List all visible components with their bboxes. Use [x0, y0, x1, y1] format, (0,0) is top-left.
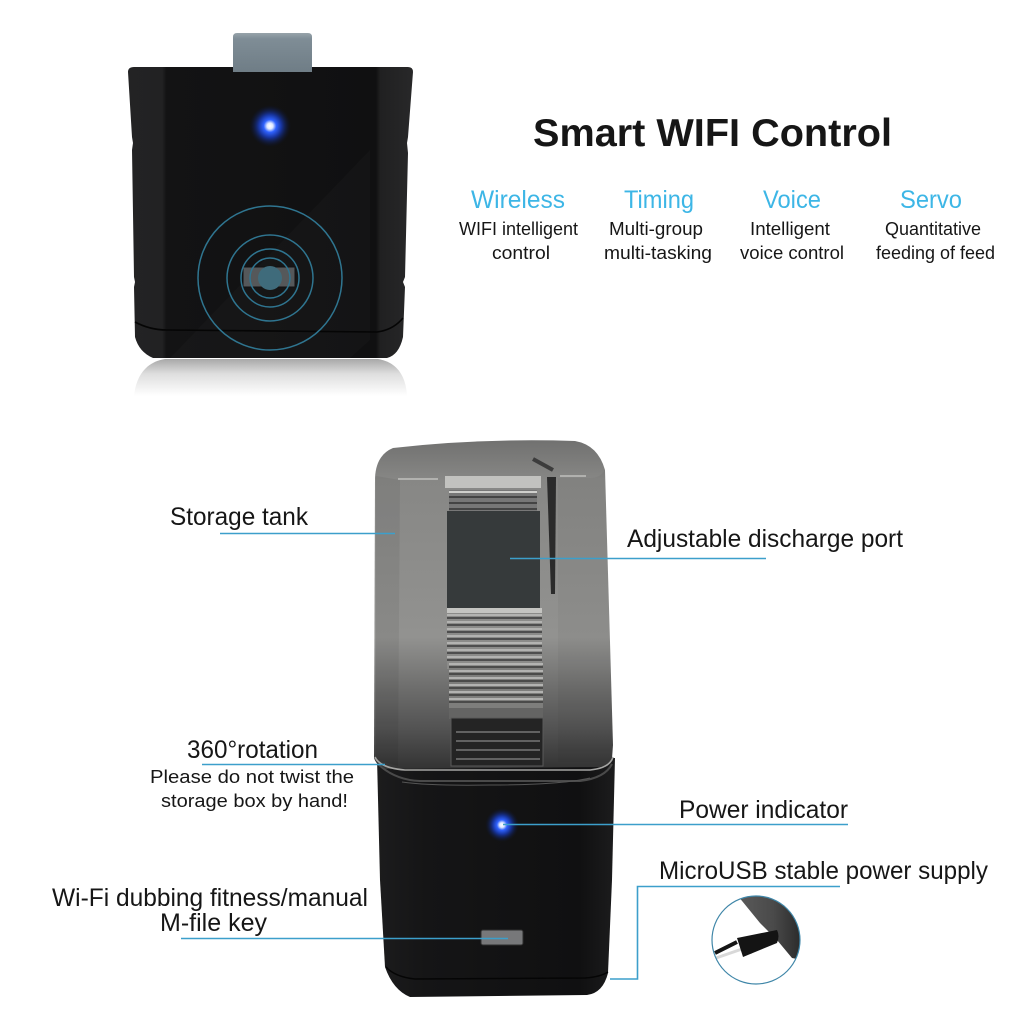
feature: Voice: Intelligent	[750, 219, 830, 239]
feature: Voice: Voice	[763, 186, 821, 214]
base bottom seam	[386, 967, 608, 979]
feature: Wireless: Wireless	[471, 186, 565, 214]
label: Power indicator: Power indicator	[679, 796, 848, 824]
grey feed tab	[233, 33, 312, 72]
blue indicator light	[249, 105, 291, 147]
label: Wi-Fi dubbing key: M-file key	[160, 909, 267, 937]
device: feeder front view	[374, 440, 615, 997]
inset: MicroUSB cable photo	[710, 895, 802, 985]
discharge window	[447, 511, 540, 608]
tank left facet shading	[376, 476, 400, 766]
silver ring between tank and base	[375, 757, 613, 770]
label: 360 rotation warning: Please do not twist the	[150, 767, 354, 787]
feature: Servo	[876, 186, 995, 263]
label: Wi-Fi dubbing key	[52, 884, 508, 938]
feature: Voice	[740, 186, 844, 263]
device: top view of WiFi controller	[128, 33, 413, 396]
feature: Servo: Servo	[900, 186, 962, 214]
ribbed slide	[447, 608, 543, 719]
feature: Timing	[604, 186, 712, 263]
right side slot	[547, 477, 556, 594]
feature: Servo: feeding of feed	[876, 243, 995, 263]
label: MicroUSB power supply	[610, 857, 988, 979]
label: 360 rotation warning: 360°rotation	[187, 736, 318, 764]
glossy diagonal highlight	[170, 150, 370, 358]
shoulder highlight	[398, 476, 586, 479]
feature: Wireless	[459, 186, 578, 263]
feature: Timing: Multi-group	[609, 219, 703, 239]
feature: Wireless: WIFI intelligent	[459, 219, 578, 239]
device body	[128, 67, 413, 358]
translucent storage tank	[374, 440, 613, 769]
feature: Servo: Quantitative	[885, 219, 981, 239]
key with concentric signal rings	[198, 206, 342, 350]
heading: Smart WIFI Control: Smart WIFI Control	[533, 112, 892, 155]
label: Adjustable discharge port: Adjustable discharge port	[627, 525, 903, 553]
sliding gate top	[445, 476, 541, 488]
feature: Timing: Timing	[624, 186, 694, 214]
label: Storage tank: Storage tank	[170, 503, 308, 531]
seam line	[135, 318, 403, 332]
M-file key button	[481, 930, 523, 945]
label: 360 rotation warning: storage box by hand!	[161, 791, 348, 811]
tank right facet shading	[558, 470, 613, 762]
label: 360 rotation warning	[150, 736, 385, 811]
feature: Wireless: control	[492, 243, 550, 263]
feature: Timing: multi-tasking	[604, 243, 712, 263]
dark lower ribs	[451, 718, 543, 766]
black base	[377, 758, 615, 997]
power indicator light	[485, 808, 519, 842]
upper ribs	[449, 490, 537, 511]
reflection under device	[134, 359, 407, 396]
label: Wi-Fi dubbing key: Wi-Fi dubbing fitness/manual	[52, 884, 368, 912]
feature: Voice: voice control	[740, 243, 844, 263]
label: MicroUSB power supply: MicroUSB stable power supply	[659, 857, 988, 885]
